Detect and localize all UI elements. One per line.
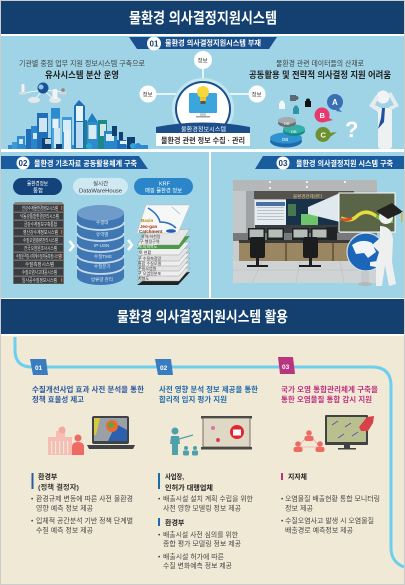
agency: ministry of environment 2: 환경부 xyxy=(165,518,185,527)
stacked map layers: 통합 수질모델 xyxy=(138,260,162,266)
agency: ministry of environment xyxy=(32,472,79,492)
ribbon 02: 02 xyxy=(18,159,28,168)
bullet list 03 xyxy=(281,494,380,534)
chairs xyxy=(247,237,321,267)
right text block xyxy=(249,58,391,80)
icon: government building and laptop xyxy=(48,416,135,455)
bullet list 02b: 배출시설 허가에 따른 xyxy=(163,552,224,561)
node: right: 정보 xyxy=(252,92,262,98)
inset map xyxy=(339,193,395,232)
heading 03 xyxy=(281,385,378,404)
heading 02 xyxy=(159,385,258,404)
pill: information integration: 통합 xyxy=(33,186,43,194)
pill: KRF mapping: KRF xyxy=(159,182,171,188)
agency: local government: 지자체 xyxy=(288,472,307,481)
ribbon 03: 03 xyxy=(278,159,288,168)
photo: control room xyxy=(233,180,403,286)
photo: control room: 물환경관제센터 xyxy=(293,193,322,200)
icon: DB stack: DB xyxy=(284,121,290,126)
column 01 xyxy=(30,359,144,534)
ribbon 01 xyxy=(129,36,277,50)
bullet list 02b: 수질 변화예측 정보 제공 xyxy=(163,561,232,570)
agency: ministry of environment 2 xyxy=(158,518,185,527)
ribbon 03 xyxy=(255,156,404,170)
stacked map layers: 수질오염원 xyxy=(138,265,157,271)
column 02 xyxy=(155,359,258,570)
bullet list 02b: • xyxy=(158,532,161,539)
stacked map layers: Jeo-gan xyxy=(140,224,158,229)
node: left: 정보 xyxy=(142,92,153,98)
diagram: central information system xyxy=(140,51,266,146)
bullet list 01: 환경규제 변동에 따른 사전 물환경 xyxy=(36,494,133,503)
banner label: 물환경 관련 정보 수집 · 관리 xyxy=(161,135,245,145)
bullet list 01: • xyxy=(31,496,34,503)
icon: DB stack: DB xyxy=(282,137,288,142)
stacked map layers: 보 현황 xyxy=(139,249,151,255)
illustration: city skyline xyxy=(8,100,148,149)
pill: information integration: 물환경정보 xyxy=(27,180,48,188)
bullet list 03: • xyxy=(281,496,284,503)
ribbon 02: 물환경 기초자료 공동활용체계 구축 xyxy=(34,158,137,168)
badge 02 xyxy=(155,359,173,375)
arrow: rack to database xyxy=(70,241,74,251)
bullet list 03: 정보 제공 xyxy=(285,504,313,512)
icon: question bubbles: ? xyxy=(345,117,358,142)
arrow: database to map layers xyxy=(128,240,132,250)
stacked map layers: 구 수질측정망 xyxy=(138,255,162,261)
heading 02: 합리적 입지 평가 지원 xyxy=(159,395,227,404)
database cylinder: IP-USN xyxy=(94,243,109,248)
column 03 xyxy=(278,357,380,534)
database cylinder: 수질분기 xyxy=(94,263,111,270)
server rack list: 낙동강통합환경관리시스템 xyxy=(20,213,59,220)
badge 02: 02 xyxy=(160,365,168,372)
left text block: 기관별 중점 업무 지원 정보시스템 구축으로 xyxy=(19,58,145,68)
badge 03 xyxy=(278,357,295,374)
server rack list: 금강수계정보구축통합 xyxy=(24,221,57,228)
pill: information integration xyxy=(13,178,62,195)
left text block: 유사시스템 분산 운영 xyxy=(45,69,119,80)
agency: business and permit agent: 인허가 대행업체 xyxy=(165,483,213,492)
bullet list 03: • xyxy=(281,518,284,525)
connecting timeline line xyxy=(15,337,404,567)
agency: business and permit agent xyxy=(158,472,213,492)
bullet list 02a: 사전 영향 모델링 정보 제공 xyxy=(163,504,241,512)
server rack list: 수질오염총량관리시스템 xyxy=(23,237,58,244)
stacked map layers xyxy=(137,205,190,285)
heading 03: 국가 오염 통합관리체계 구축을 xyxy=(281,385,378,394)
stacked map layers: Catchment xyxy=(139,229,163,234)
ribbon 01: 01 xyxy=(150,40,159,48)
banner label xyxy=(156,122,250,146)
section header band: 물환경 의사결정지원시스템 활용 xyxy=(117,309,288,326)
agency: ministry of environment: (정책 결정자) xyxy=(38,482,79,492)
badge 01 xyxy=(30,359,48,375)
server rack list: 일사공수질정보시스템 xyxy=(22,277,57,284)
stacked map layers: 구 오염원분포 xyxy=(138,270,162,276)
icon: question bubbles xyxy=(314,94,358,142)
pill: KRF mapping xyxy=(134,178,193,195)
panel: 01 absence of system xyxy=(1,36,404,149)
icon: network people and monitor xyxy=(294,415,374,452)
banner label: 물환경정보시스템 xyxy=(181,126,226,134)
bullet list 03: 오염물질 배출현황 통합 모니터링 xyxy=(285,494,380,503)
bullet list 02a: 배출시설 설치 계획 수립을 위한 xyxy=(163,494,253,503)
bullet list 03: 배출경로 예측정보 제공 xyxy=(285,526,353,534)
connector lines xyxy=(155,65,250,94)
stacked map layers: 유역/하천망 xyxy=(141,233,161,239)
globe with figure xyxy=(347,203,403,286)
server rack list: 수질측정시스템 xyxy=(25,261,54,268)
pill: real-time data warehouse: DataWareHouse xyxy=(79,188,122,194)
pill: KRF mapping: 매핑 물환경 정보 xyxy=(145,186,182,194)
bullet list 02b xyxy=(158,530,241,570)
stacked map layers: 구 행정구역 xyxy=(140,238,160,244)
stacked map layers: 지형도 xyxy=(138,275,149,281)
badge 01: 01 xyxy=(35,365,43,372)
heading 03: 통한 오염물질 통합 감시 지원 xyxy=(281,395,372,404)
heading 02: 사전 영향 분석 정보 제공을 통한 xyxy=(159,385,258,394)
icon: monitor with bulb xyxy=(189,86,217,118)
heading 01: 수질개선사업 효과 사전 분석을 통한 xyxy=(32,385,144,394)
bullet list 02a xyxy=(158,494,253,512)
bullet list 02b: 종합 평가 모델링 정보 제공 xyxy=(163,539,241,548)
bullet list 01: 입체적 공간분석 기반 정책 단계별 xyxy=(36,516,133,525)
heading 01: 정책 효율성 제고 xyxy=(32,395,84,404)
ribbon 01: 물환경 의사결정지원시스템 부재 xyxy=(165,38,261,48)
section header band xyxy=(1,299,404,334)
bullet list 01: • xyxy=(31,518,34,525)
bullet list 01: 영향 예측 정보 제공 xyxy=(36,504,93,512)
server rack list: 영산강수계정보시스템 xyxy=(23,229,58,236)
server rack list: 수질원격감시체계수질자동측정시스템 xyxy=(16,253,61,260)
agency: ministry of environment: 환경부 xyxy=(38,472,58,481)
database cylinder: 수생태 xyxy=(96,219,108,226)
node: top: 정보 xyxy=(198,58,208,64)
bullet list 02b: 배출시설 사전 심의를 위한 xyxy=(163,530,238,539)
server rack list: 한강수계물환경정보시스템 xyxy=(22,205,58,212)
icon: question bubbles: C xyxy=(320,130,326,140)
pill: real-time data warehouse xyxy=(73,178,128,195)
bullet list 02a: • xyxy=(158,496,161,503)
icon: DB stack xyxy=(270,117,305,148)
server rack list xyxy=(13,202,64,284)
database cylinder: 수질TMS xyxy=(94,253,112,260)
right text block: 물환경 관련 데이터들의 산재로 xyxy=(276,58,364,68)
icon: puzzle pieces xyxy=(279,95,311,114)
server rack list: 수질오염사고대응시스템 xyxy=(22,269,57,276)
right text block: 공동활용 및 전략적 의사결정 지원 어려움 xyxy=(249,69,391,80)
database cylinder: 유역별 xyxy=(96,231,108,238)
illustration: confused figure xyxy=(369,90,399,149)
database cylinder: 방류량 관리 xyxy=(91,276,113,283)
icon: question bubbles: B xyxy=(320,111,326,120)
page header band: 물환경 의사결정지원시스템 xyxy=(129,10,277,27)
stacked map layers: 토지피복도 xyxy=(139,243,158,249)
ribbon 03: 물환경 의사결정지원 시스템 구축 xyxy=(296,158,393,168)
badge 03: 03 xyxy=(282,364,290,371)
panel: 03 decision support system build xyxy=(211,152,404,298)
left text block xyxy=(19,58,145,80)
icon: network platforms xyxy=(19,82,67,103)
bullet list 01 xyxy=(31,494,133,534)
page header band xyxy=(1,1,404,34)
bullet list 02b: • xyxy=(158,554,161,561)
database cylinder xyxy=(77,205,124,285)
ribbon 02 xyxy=(1,156,148,170)
icon: question bubbles: A xyxy=(332,98,338,107)
agency: business and permit agent: 사업장, xyxy=(165,472,184,481)
agency: local government xyxy=(281,472,307,481)
panel: 02 shared data system xyxy=(1,152,209,298)
heading 01 xyxy=(32,385,144,404)
pill: real-time data warehouse: 실시간 xyxy=(93,180,108,188)
icon: presenter and map board xyxy=(170,416,252,456)
stacked map layers: Basin xyxy=(141,218,154,223)
bullet list 03: 수질오염사고 발생 시 오염물질 xyxy=(285,516,374,525)
server rack list: 전국오염원조사시스템 xyxy=(24,245,57,252)
bullet list 01: 수질 예측 정보 제공 xyxy=(36,526,93,534)
icon: DB stack: DB xyxy=(291,129,297,134)
